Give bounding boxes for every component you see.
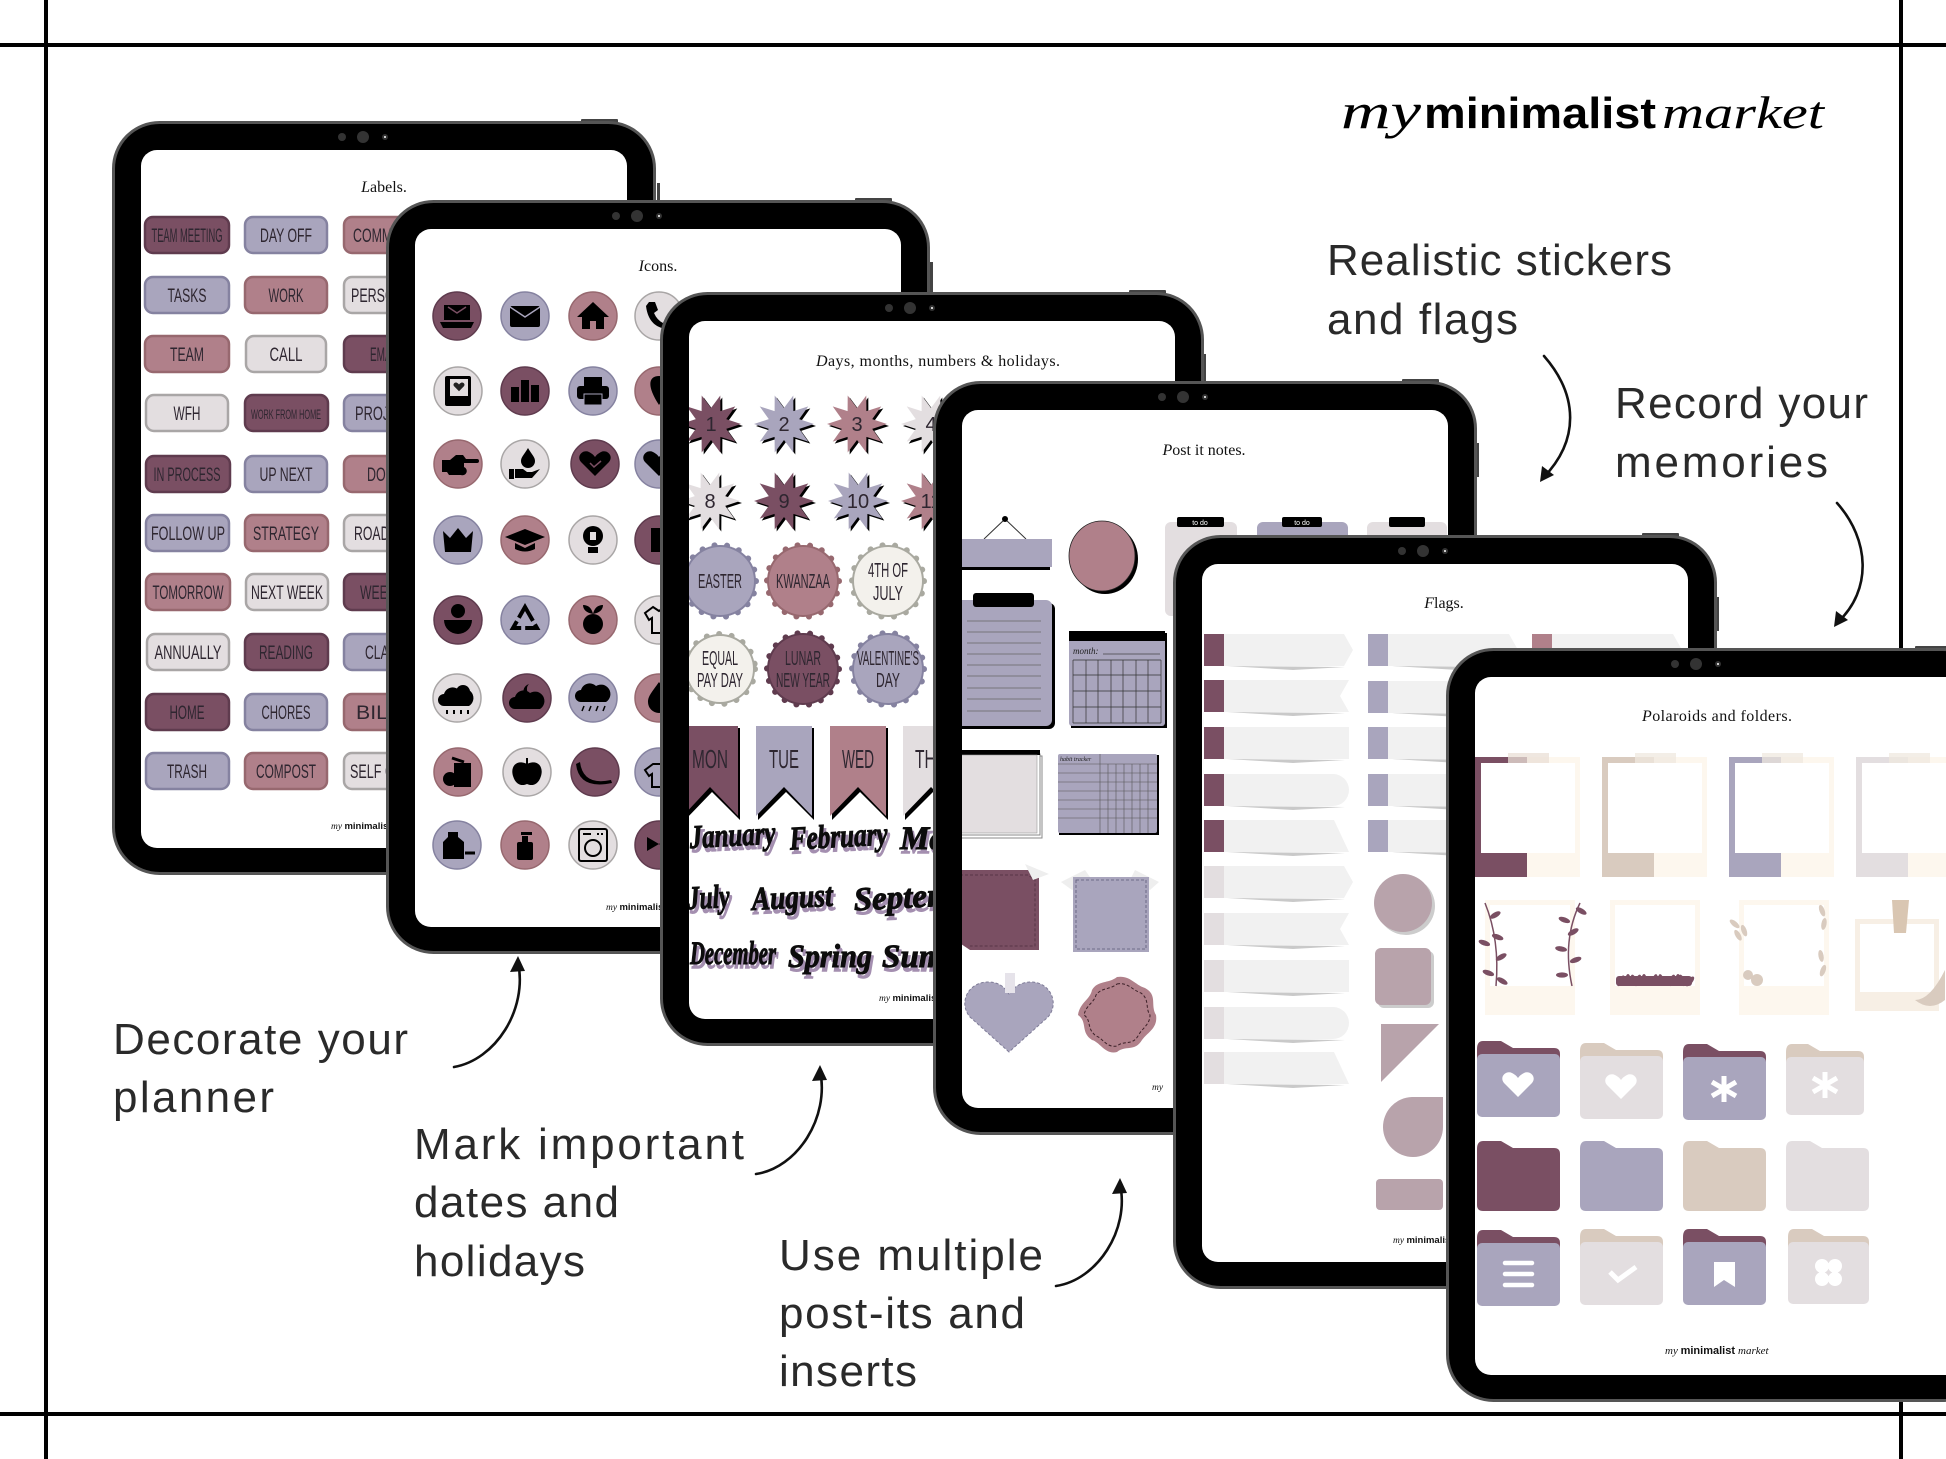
arrow: record memories xyxy=(1834,503,1863,627)
floral polaroid: plum leaves xyxy=(1610,900,1700,1015)
month lettering: August xyxy=(751,882,836,922)
callout: post-its xyxy=(779,1231,1043,1396)
label stickers: COMPOST xyxy=(256,762,316,783)
label stickers: TASKS xyxy=(168,286,206,307)
callout: realistic stickers: Realistic stickers xyxy=(1327,236,1672,285)
number stars: 1 xyxy=(705,414,717,436)
icon: apple xyxy=(503,748,551,796)
icon: tree in bowl xyxy=(434,596,482,644)
tablet: post it notes xyxy=(934,379,1479,1134)
label stickers: EMAIL xyxy=(370,345,400,366)
weekday banners: TUE xyxy=(769,744,799,774)
number stars: 2 xyxy=(778,414,790,436)
footer logo: my minimalist xyxy=(879,993,940,1004)
icon: pointing hand xyxy=(434,440,482,488)
month lettering: August xyxy=(749,878,834,918)
callout: mark dates xyxy=(414,1120,744,1286)
plum stitched note xyxy=(955,864,1049,950)
icon: heart xyxy=(635,440,683,488)
label stickers: COMMUTE xyxy=(353,226,417,247)
label stickers: IN PROCESS xyxy=(154,465,220,486)
callout: mark dates: Mark important xyxy=(414,1120,744,1169)
icon: rain cloud xyxy=(569,674,617,722)
callout: mark dates: dates and xyxy=(414,1178,619,1227)
heading: labels: Labels. xyxy=(360,179,407,196)
icon: drop xyxy=(635,674,683,722)
month lettering: December xyxy=(691,940,779,976)
to-do notes: to do xyxy=(1192,520,1208,527)
callout: mark dates: holidays xyxy=(414,1237,585,1286)
habit tracker xyxy=(1058,754,1159,835)
label stickers: READING xyxy=(259,643,313,664)
flag column 1 xyxy=(1204,634,1353,1088)
heading: icons: Icons. xyxy=(638,258,677,275)
lavender stitched note xyxy=(1061,870,1159,952)
icon: boot xyxy=(635,516,683,564)
callout: post-its: Use multiple xyxy=(779,1231,1043,1280)
holiday badges: 4TH OF xyxy=(868,560,908,582)
month lettering: March xyxy=(899,821,992,857)
polaroid row 2 xyxy=(1478,900,1945,1015)
label stickers: UP NEXT xyxy=(260,465,313,486)
label stickers: TEAM xyxy=(170,345,204,366)
heading: polaroids: Polaroids and folders. xyxy=(1641,708,1792,725)
month lettering: September xyxy=(853,875,999,918)
round note xyxy=(1069,521,1138,594)
shadowed shapes xyxy=(1374,874,1443,1210)
holiday badges xyxy=(684,545,924,705)
number stars: 4 xyxy=(925,414,937,436)
calendar note: month: xyxy=(1073,646,1098,656)
icon: shirt xyxy=(635,596,683,644)
tablet: days months numbers holidays xyxy=(662,290,1206,1044)
month lettering: July xyxy=(688,883,733,921)
number stars: 11 xyxy=(921,491,941,513)
icon stickers xyxy=(433,292,683,869)
callout: post-its: post-its and xyxy=(779,1289,1025,1338)
number stars: 3 xyxy=(851,414,863,436)
hanging sign xyxy=(955,516,1052,570)
tablet: flags xyxy=(1174,533,1719,1288)
tablet: icons xyxy=(388,198,933,952)
weekday banners xyxy=(689,726,933,820)
icon: laptop mail xyxy=(433,292,481,340)
holiday badges: KWANZAA xyxy=(776,571,830,593)
holiday badges: VALENTINE'S xyxy=(857,648,919,670)
arrow: mark dates xyxy=(756,1065,827,1174)
callout: realistic stickers: and flags xyxy=(1327,295,1518,344)
flag column 3 xyxy=(1532,634,1682,670)
icon: groceries xyxy=(434,748,482,796)
habit tracker: habit tracker xyxy=(1060,757,1092,763)
icon: book xyxy=(434,367,482,415)
callout: record memories xyxy=(1615,379,1868,487)
icon: hand with drop xyxy=(501,440,549,488)
icon: banana xyxy=(571,748,619,796)
flag column 2 xyxy=(1368,634,1518,856)
heading: flags: Flags. xyxy=(1423,595,1464,612)
tablet: polaroids and folders xyxy=(1448,646,1946,1400)
month lettering: February xyxy=(788,817,889,858)
callout: record memories: Record your xyxy=(1615,379,1868,428)
month lettering: December xyxy=(689,936,777,972)
brand logo: my xyxy=(1341,83,1422,139)
label stickers: BILLS xyxy=(356,703,414,724)
folders row 3 xyxy=(1477,1229,1869,1306)
holiday badges: EQUAL xyxy=(702,648,738,670)
arrow: realistic stickers xyxy=(1540,356,1570,482)
icon: detergent bottle xyxy=(433,821,481,869)
heading: post it notes: Post it notes. xyxy=(1161,442,1246,459)
icon: light bulb xyxy=(569,516,617,564)
month lettering: March xyxy=(901,825,994,861)
month lettering: February xyxy=(790,820,891,862)
callout: realistic stickers xyxy=(1327,236,1672,344)
month lettering xyxy=(689,824,933,979)
arrow: decorate planner xyxy=(454,956,525,1067)
icon: heart check xyxy=(571,440,619,488)
callout: decorate planner xyxy=(113,1015,408,1122)
icon: bow xyxy=(635,821,683,869)
number stars: 8 xyxy=(704,491,716,513)
label stickers: ANNUALLY xyxy=(154,643,222,664)
flower note xyxy=(1078,977,1156,1052)
clipboard note xyxy=(955,593,1055,729)
icon: cloud moon xyxy=(503,674,551,722)
month lettering: September xyxy=(855,879,1001,922)
icon: washing machine xyxy=(569,821,617,869)
label stickers: ROADMAP xyxy=(354,524,416,545)
heading: days: Days, months, numbers & holidays. xyxy=(815,353,1060,370)
holiday badges: EASTER xyxy=(698,571,742,593)
label stickers: WORK xyxy=(268,286,304,307)
tablet: labels xyxy=(114,119,660,874)
icon: envelope xyxy=(501,292,549,340)
month lettering: July xyxy=(686,879,731,917)
label stickers: CLASS xyxy=(365,643,405,664)
label stickers: CALL xyxy=(270,345,302,366)
label stickers: WORK FROM HOME xyxy=(251,406,321,422)
label stickers: PROJECT xyxy=(355,404,415,425)
callout: record memories: memories xyxy=(1615,438,1828,487)
to-do notes: to do xyxy=(1294,520,1310,527)
footer logo: my minimalist xyxy=(1393,1235,1454,1246)
icon: crown xyxy=(434,516,482,564)
icon: hanging shirt xyxy=(635,748,683,796)
label stickers: SELF CARE xyxy=(350,762,420,783)
holiday badges: LUNAR xyxy=(785,648,821,670)
holiday badges: JULY xyxy=(873,583,903,605)
icon: printer xyxy=(569,367,617,415)
number stars: 9 xyxy=(778,491,790,513)
brand logo xyxy=(1341,83,1826,139)
label stickers: DAY OFF xyxy=(260,226,312,247)
icon: sprout globe xyxy=(569,596,617,644)
footer logo: my minimalist market xyxy=(1665,1345,1770,1357)
icon: soap dispenser xyxy=(501,821,549,869)
icon: house xyxy=(569,292,617,340)
polaroid row 1 xyxy=(1475,753,1946,877)
label stickers: WEEKLY xyxy=(360,583,410,604)
label stickers: STRATEGY xyxy=(253,524,319,545)
label stickers: TEAM MEETING xyxy=(152,226,222,247)
month lettering: Spring xyxy=(790,943,874,979)
number stars xyxy=(689,396,942,532)
weekday banners: MON xyxy=(692,744,728,774)
footer logo: my xyxy=(1152,1083,1164,1093)
icon: phone xyxy=(635,292,683,340)
month lettering: Spring xyxy=(788,939,872,975)
icon: cloud sun xyxy=(433,674,481,722)
holiday badges: PAY DAY xyxy=(697,670,743,692)
arrow: post-its xyxy=(1056,1178,1127,1286)
floral polaroid: plum vines xyxy=(1478,900,1588,1015)
month lettering: Summer xyxy=(884,943,1001,979)
label stickers: PERSONAL xyxy=(351,286,419,307)
label stickers: NEXT WEEK xyxy=(251,583,323,604)
label stickers: WFH xyxy=(174,404,200,425)
brand logo: minimalist xyxy=(1424,89,1656,138)
icon: pin xyxy=(635,367,683,415)
footer logo: my minimalist xyxy=(331,821,392,832)
taped polaroid xyxy=(1855,900,1945,1011)
icon: graduation cap xyxy=(501,516,549,564)
footer logo: my minimalist xyxy=(606,902,667,913)
floral polaroid: beige leaves xyxy=(1728,900,1829,1015)
label stickers: HOME xyxy=(170,703,204,724)
weekday banners: WED xyxy=(842,744,874,774)
icon: recycle xyxy=(501,596,549,644)
label stickers: FOLLOW UP xyxy=(151,524,225,545)
folders row 1 xyxy=(1477,1041,1864,1120)
label stickers: CHORES xyxy=(262,703,310,724)
weekday banners: THU xyxy=(915,744,947,774)
number stars: 10 xyxy=(847,491,869,513)
heart note xyxy=(965,973,1053,1052)
label stickers: DONE xyxy=(367,465,403,486)
callout: post-its: inserts xyxy=(779,1347,917,1396)
label stickers xyxy=(145,217,426,789)
callout: decorate planner: Decorate your xyxy=(113,1015,408,1064)
stacked paper xyxy=(955,750,1042,838)
calendar note xyxy=(1069,631,1167,728)
callout: decorate planner: planner xyxy=(113,1073,274,1122)
month lettering: Summer xyxy=(882,939,999,975)
label stickers: TRASH xyxy=(167,762,207,783)
month lettering: January xyxy=(690,820,779,860)
holiday badges: NEW YEAR xyxy=(776,670,830,692)
folders row 2 xyxy=(1477,1141,1869,1211)
brand logo: market xyxy=(1662,87,1826,138)
holiday badges: DAY xyxy=(876,670,900,692)
to-do notes xyxy=(1165,517,1447,616)
icon: bars xyxy=(501,367,549,415)
month lettering: January xyxy=(688,816,777,856)
label stickers: TOMORROW xyxy=(152,583,224,604)
